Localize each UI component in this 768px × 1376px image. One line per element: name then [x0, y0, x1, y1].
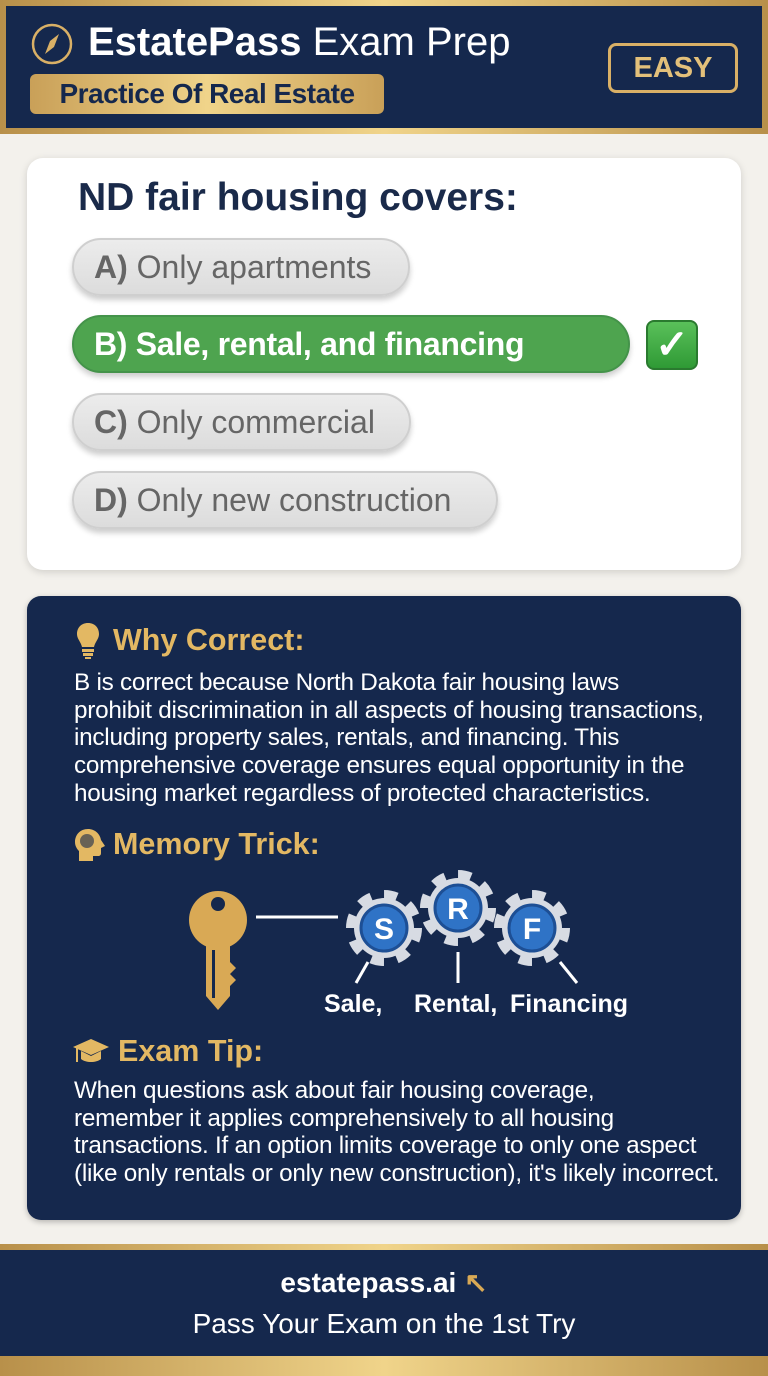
gear S: S	[374, 913, 394, 946]
text: why correct: prohibit discrimination in all aspects of housing transactions,	[74, 697, 704, 724]
icon: check mark: ✓	[655, 323, 689, 367]
text: exam tip: transactions. If an option limits coverage to only one aspect	[74, 1132, 696, 1159]
icon: check mark	[646, 320, 698, 370]
text: why correct: housing market regardless of protected characteristics.	[74, 780, 650, 807]
icon: grad cap	[73, 1039, 109, 1062]
heading: exam tip: Exam Tip:	[118, 1034, 263, 1068]
text: exam tip: (like only rentals or only new construction), it's likely incorrect.	[74, 1160, 719, 1187]
option C: C) Only commercial	[94, 404, 375, 440]
option D: D) Only new construction	[94, 482, 451, 518]
option B correct	[72, 315, 630, 373]
gear F: F	[523, 913, 541, 946]
diagram: key and gears	[189, 870, 628, 1018]
header	[0, 0, 768, 134]
subtitle pill	[30, 74, 384, 114]
text: exam tip: remember it applies comprehensively to all housing	[74, 1105, 614, 1132]
text: why correct: B is correct because North Dakota fair housing laws	[74, 669, 619, 696]
difficulty badge: EASY	[634, 52, 712, 84]
text: exam tip: When questions ask about fair housing coverage,	[74, 1077, 594, 1104]
gear R: R	[447, 893, 469, 926]
diagram: key and gears: Rental,	[414, 990, 497, 1018]
heading: memory trick: Memory Trick:	[113, 827, 320, 861]
question: ND fair housing covers:	[78, 176, 518, 219]
panel: explanation	[27, 596, 741, 1220]
labels: Sale,	[324, 990, 382, 1018]
heading: why correct: Why Correct:	[113, 623, 304, 657]
option C	[72, 393, 411, 451]
text: why correct: comprehensive coverage ensures equal opportunity in the	[74, 752, 684, 779]
option B correct: B) Sale, rental, and financing	[94, 326, 524, 362]
diagram: key and gears: Financing	[510, 990, 628, 1018]
icon: brain head	[75, 829, 105, 861]
footer url: estatepass.ai ↖︎	[280, 1267, 488, 1298]
difficulty badge	[608, 43, 738, 93]
gear S	[352, 896, 416, 960]
gear R	[426, 876, 490, 940]
icon: compass	[32, 24, 72, 64]
text: why correct	[74, 669, 704, 807]
footer tagline: Pass Your Exam on the 1st Try	[193, 1308, 575, 1339]
text: why correct: including property sales, rentals, and financing. This	[74, 724, 619, 751]
footer	[0, 1244, 768, 1376]
title: EstatePass Exam Prep	[88, 20, 510, 64]
gear F	[500, 896, 564, 960]
text: exam tip	[74, 1077, 719, 1187]
option D	[72, 471, 498, 529]
option A: A) Only apartments	[94, 249, 371, 285]
icon: key	[189, 891, 247, 1010]
panel: question card	[27, 158, 741, 570]
option A	[72, 238, 410, 296]
icon: bulb	[77, 623, 99, 659]
subtitle pill: Practice Of Real Estate	[59, 78, 355, 109]
